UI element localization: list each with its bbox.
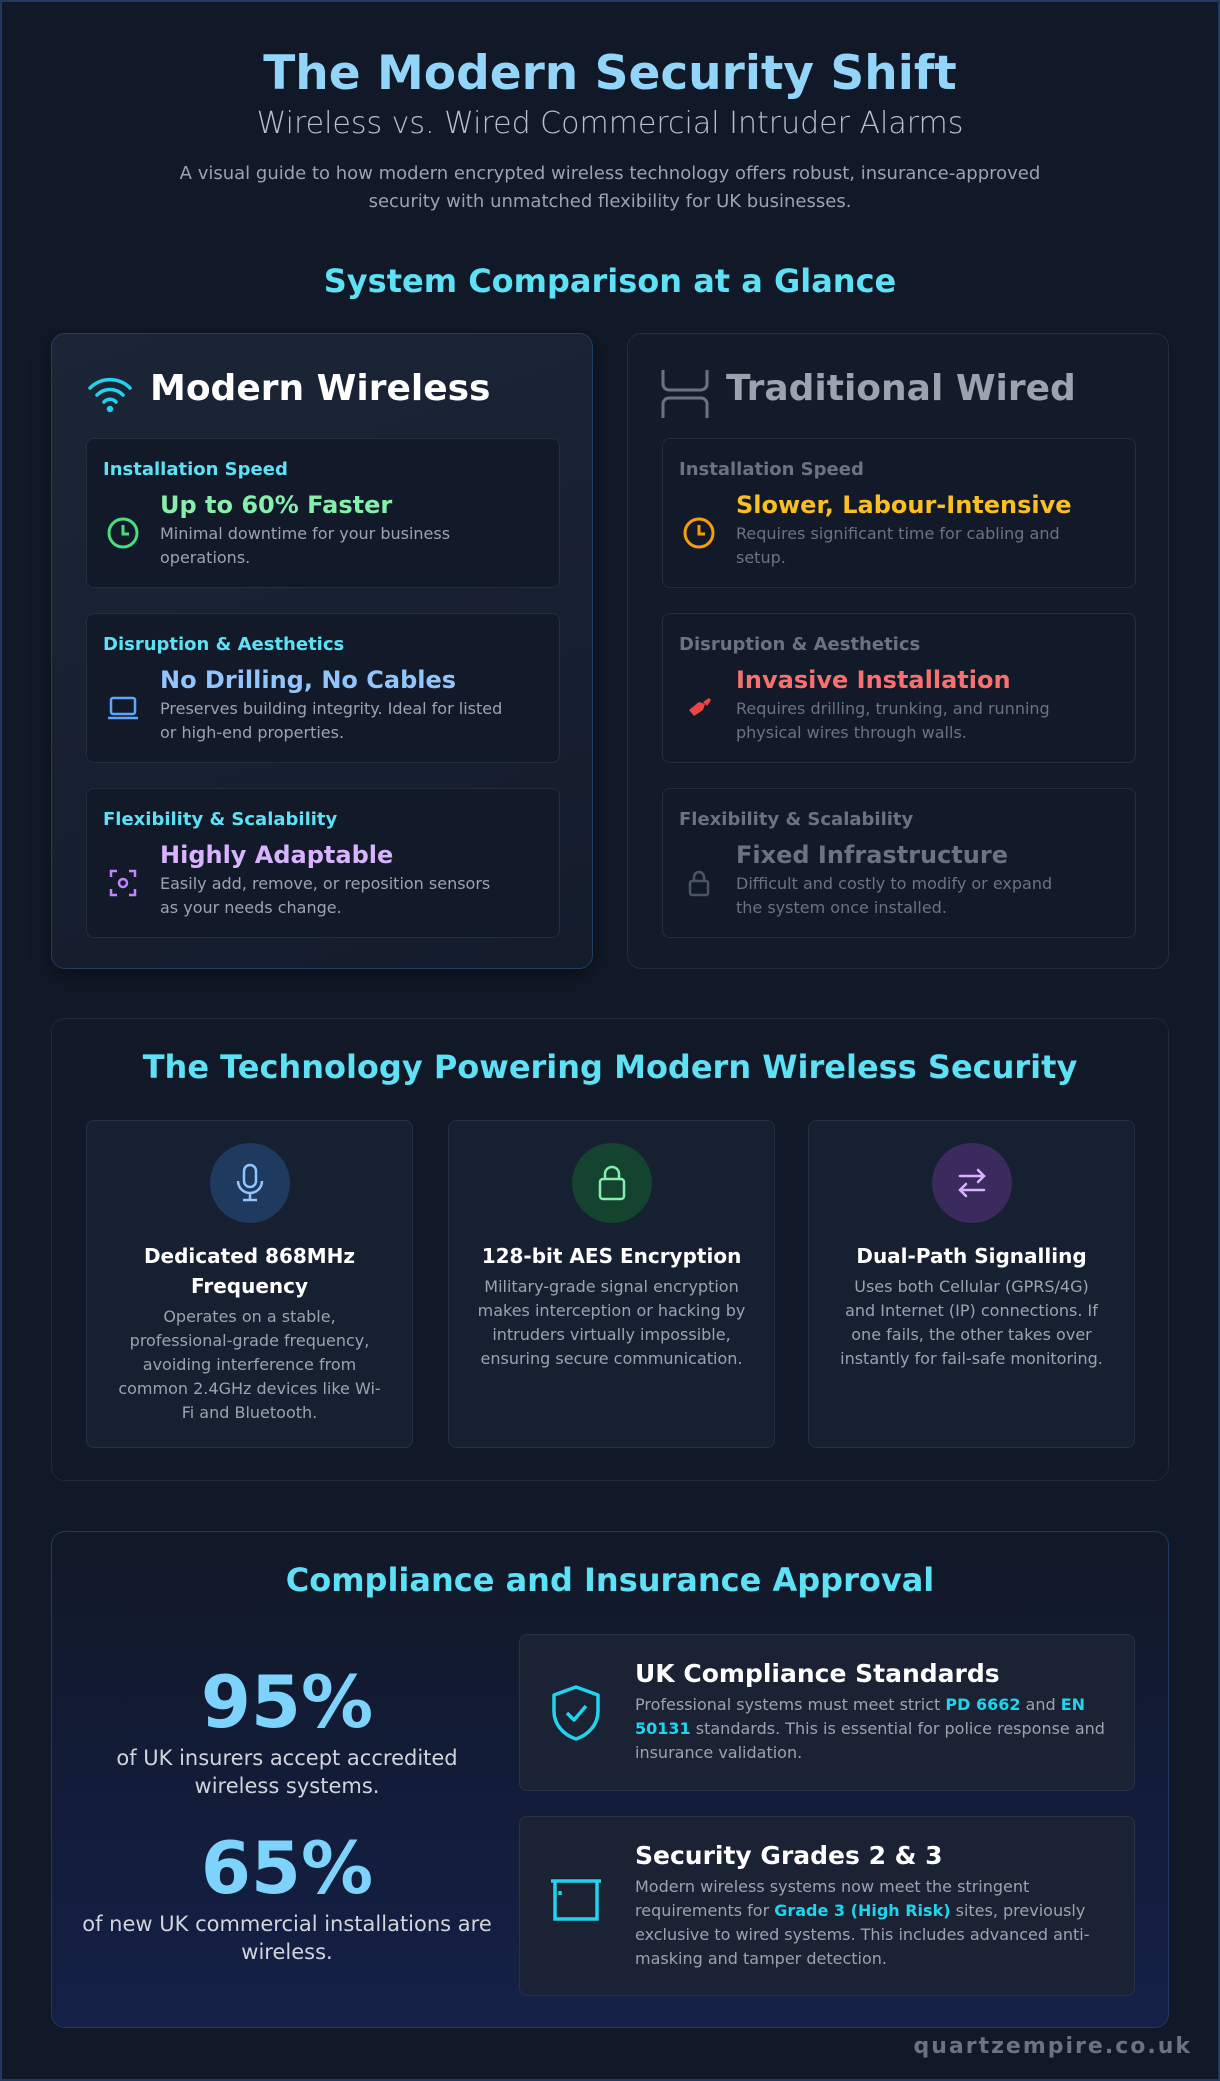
card: installation speed: Up to 60% Faster — [160, 491, 392, 519]
title: The Modern Security Shift — [263, 46, 957, 101]
card: encryption — [448, 1120, 775, 1448]
card: installation speed — [86, 438, 560, 588]
icon: shield — [552, 1685, 600, 1741]
icon: tray — [551, 1879, 601, 1921]
panel: technology — [51, 1018, 1169, 1481]
card: installation speed — [662, 438, 1136, 588]
card: disruption: Preserves building integrity. Ideal for listed or high-end properties. — [160, 699, 502, 742]
icon: arrows — [932, 1143, 1012, 1223]
card: dual path: Dual-Path Signalling — [856, 1244, 1087, 1268]
card: flexibility: Flexibility & Scalability — [679, 809, 913, 830]
card: flexibility: Highly Adaptable — [160, 841, 393, 869]
icon: wifi — [88, 378, 132, 412]
card: installation speed: Slower, Labour-Intensive — [736, 491, 1072, 519]
icon: microphone — [210, 1143, 290, 1223]
card: flexibility: Difficult and costly to modify or expand the system once installed. — [736, 874, 1052, 917]
section heading: comparison: System Comparison at a Glance — [324, 262, 896, 300]
card: 868MHz — [86, 1120, 413, 1448]
stat: 95% — [116, 1660, 458, 1798]
panel: traditional wired — [627, 333, 1169, 969]
heading: technology: The Technology Powering Modern Wireless Security — [143, 1048, 1077, 1086]
card: flexibility — [662, 788, 1136, 938]
panel: modern wireless — [51, 333, 593, 969]
card: UK compliance — [519, 1634, 1135, 1791]
stat: 65%: 65% — [201, 1826, 373, 1910]
heading: traditional wired: Traditional Wired — [726, 368, 1076, 409]
icon: scan — [110, 870, 136, 896]
card: dual path — [808, 1120, 1135, 1448]
card: disruption: Invasive Installation — [736, 666, 1011, 694]
card: disruption: Disruption & Aesthetics — [679, 634, 920, 655]
card: installation speed: Installation Speed — [679, 459, 864, 480]
card: security grades: Security Grades 2 & 3 — [635, 1841, 943, 1870]
card: installation speed: Installation Speed — [103, 459, 288, 480]
card: UK compliance: Professional systems must meet strict PD 6662 and EN 50131 standards. This is essential for police response and insurance validation. — [635, 1695, 1105, 1762]
card: dual path: Uses both Cellular (GPRS/4G) and Internet (IP) connections. If one fails, the other takes over instantly for fail-safe monitoring. — [840, 1277, 1103, 1368]
stat: 95%: wireless systems. — [195, 1774, 379, 1798]
subtitle: Wireless vs. Wired Commercial Intruder Alarms — [257, 106, 963, 141]
card: 868MHz: Operates on a stable, professional-grade frequency, avoiding interference from common 2.4GHz devices like Wi-Fi and Bluetooth. — [118, 1307, 381, 1422]
card: UK compliance: UK Compliance Standards — [635, 1659, 1000, 1688]
card: installation speed: Requires significant time for cabling and setup. — [736, 524, 1060, 567]
card: 868MHz: Dedicated 868MHz Frequency — [144, 1244, 355, 1298]
card: installation speed: Minimal downtime for your business operations. — [160, 524, 450, 567]
card: flexibility: Easily add, remove, or reposition sensors as your needs change. — [160, 874, 490, 917]
heading: modern wireless: Modern Wireless — [150, 368, 490, 409]
stat: 95%: 95% — [201, 1660, 373, 1744]
stat: 95%: of UK insurers accept accredited — [116, 1746, 458, 1770]
panel: compliance — [51, 1531, 1169, 2028]
stat: 65% — [82, 1826, 492, 1964]
card: disruption: Disruption & Aesthetics — [103, 634, 344, 655]
stat: 65%: of new UK commercial installations are — [82, 1912, 492, 1936]
card: flexibility — [86, 788, 560, 938]
intro text: A visual guide to how modern encrypted wireless technology offers robust, insurance-approved security with unmatched flexibility for UK businesses. — [180, 163, 1040, 212]
card: disruption: Requires drilling, trunking, and running physical wires through walls. — [736, 699, 1050, 742]
icon: laptop — [108, 696, 138, 720]
card: disruption — [86, 613, 560, 763]
stat: 65%: wireless. — [241, 1940, 333, 1964]
card: security grades: Modern wireless systems now meet the stringent requirements for Grade 3 (High Risk) sites, previously exclusive to wired systems. This includes advanced anti-masking and tamper detection. — [635, 1877, 1090, 1968]
footer: website: quartzempire.co.uk — [914, 2034, 1192, 2059]
icon: lock — [688, 870, 710, 896]
card: encryption: Military-grade signal encryption makes interception or hacking by intruders virtually impossible, ensuring secure communication. — [478, 1277, 745, 1368]
icon: drill — [689, 698, 711, 716]
card: security grades — [519, 1816, 1135, 1996]
icon: clock — [108, 518, 138, 548]
icon: lock — [572, 1143, 652, 1223]
card: encryption: 128-bit AES Encryption — [482, 1244, 741, 1268]
card: disruption — [662, 613, 1136, 763]
icon: cable — [662, 370, 708, 418]
card: flexibility: Flexibility & Scalability — [103, 809, 337, 830]
icon: clock — [684, 518, 714, 548]
heading: compliance: Compliance and Insurance Approval — [286, 1561, 934, 1599]
card: disruption: No Drilling, No Cables — [160, 666, 456, 694]
card: flexibility: Fixed Infrastructure — [736, 841, 1008, 869]
